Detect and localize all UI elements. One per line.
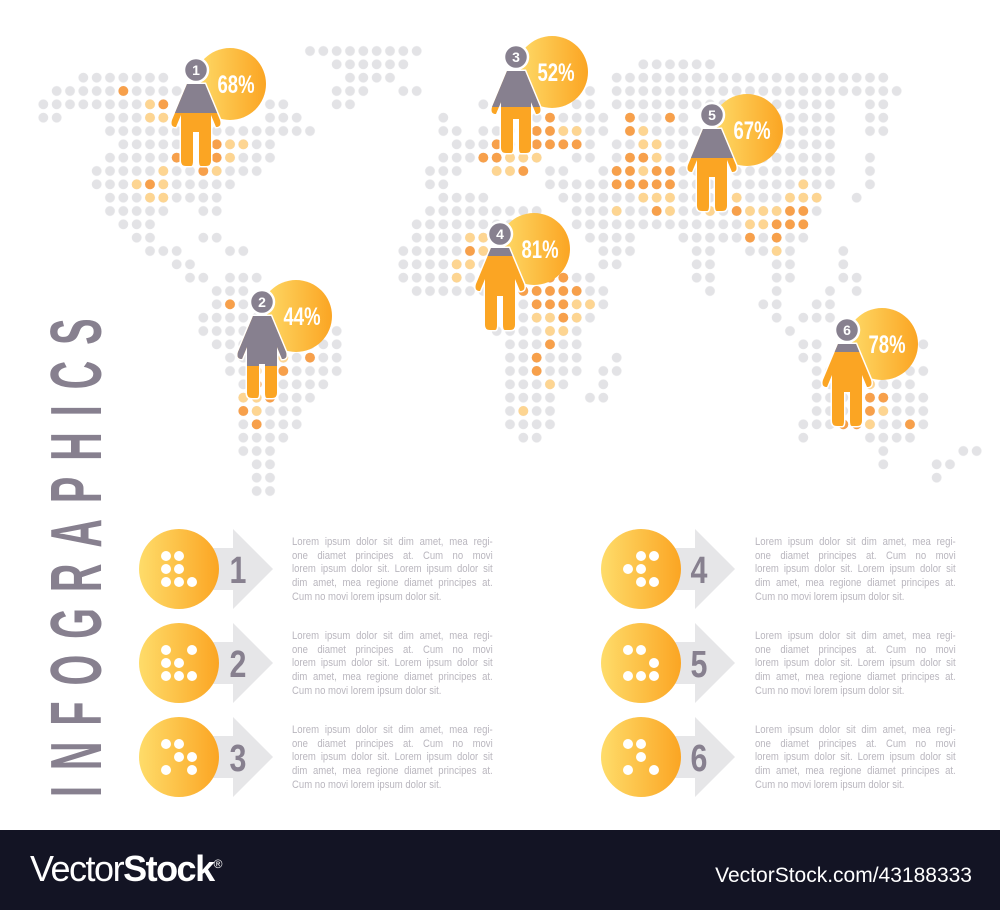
text block 5 xyxy=(755,630,956,697)
figure 5: 67%: 67% xyxy=(733,116,771,145)
text block 2 xyxy=(292,630,493,697)
text block 3: dim amet, mea regione diamet principes at. xyxy=(292,765,493,777)
figure 2: 44%: 44% xyxy=(283,302,321,331)
text block 5: lorem ipsum dolor sit. Lorem ipsum dolor sit xyxy=(755,657,956,669)
figure 3: 52% xyxy=(486,36,588,153)
footer logo: VectorStock® xyxy=(30,848,221,889)
text block 3: lorem ipsum dolor sit. Lorem ipsum dolor sit xyxy=(292,751,493,763)
figure 6: 78%: 78% xyxy=(868,330,906,359)
figure 2: 44% xyxy=(232,280,332,398)
text block 6: Cum no movi lorem ipsum dolor sit. xyxy=(755,779,904,791)
highlighted orange dots xyxy=(118,86,915,429)
text block 3: Lorem ipsum dolor sit dim amet, mea regi- xyxy=(292,724,493,736)
text block 1: dim amet, mea regione diamet principes at. xyxy=(292,577,493,589)
item 5 xyxy=(601,623,735,703)
text block 4 xyxy=(755,536,956,603)
text block 1: lorem ipsum dolor sit. Lorem ipsum dolor sit xyxy=(292,563,493,575)
text block 1 xyxy=(292,536,493,603)
text block 6: one diamet principes at. Cum no movi xyxy=(755,738,956,750)
item 4: 4 xyxy=(691,550,707,592)
figure 5: 67% xyxy=(682,94,783,211)
text block 5: dim amet, mea regione diamet principes at. xyxy=(755,671,956,683)
text block 4: Lorem ipsum dolor sit dim amet, mea regi- xyxy=(755,536,956,548)
text block 4: one diamet principes at. Cum no movi xyxy=(755,550,956,562)
figure 2: 44%: 2 xyxy=(258,294,266,310)
figure 4: 81% xyxy=(470,213,570,330)
figure 1: 68% xyxy=(166,48,266,166)
text block 1: Cum no movi lorem ipsum dolor sit. xyxy=(292,591,441,603)
figure 6: 78% xyxy=(817,308,918,426)
item 2 xyxy=(139,623,273,703)
item 3 xyxy=(139,717,273,797)
text block 6: Lorem ipsum dolor sit dim amet, mea regi- xyxy=(755,724,956,736)
figure 4: 81%: 4 xyxy=(496,226,504,242)
text block 6: dim amet, mea regione diamet principes at. xyxy=(755,765,956,777)
figure 1: 68%: 68% xyxy=(217,70,255,99)
figure 3: 52%: 3 xyxy=(512,49,520,65)
list items with braille icons xyxy=(139,529,735,797)
text block 4: dim amet, mea regione diamet principes at. xyxy=(755,577,956,589)
text block 5: one diamet principes at. Cum no movi xyxy=(755,644,956,656)
text block 6: lorem ipsum dolor sit. Lorem ipsum dolor sit xyxy=(755,751,956,763)
text block 6 xyxy=(755,724,956,791)
item 6 xyxy=(601,717,735,797)
text block 3 xyxy=(292,724,493,791)
figure 3: 52%: 52% xyxy=(537,58,575,87)
text block 2: Cum no movi lorem ipsum dolor sit. xyxy=(292,685,441,697)
text block 3: Cum no movi lorem ipsum dolor sit. xyxy=(292,779,441,791)
item 5: 5 xyxy=(691,644,707,686)
text block 2: lorem ipsum dolor sit. Lorem ipsum dolor sit xyxy=(292,657,493,669)
item 6: 6 xyxy=(691,738,707,780)
item 3: 3 xyxy=(230,738,246,780)
figure 4: 81%: 81% xyxy=(521,235,559,264)
text block 1: one diamet principes at. Cum no movi xyxy=(292,550,493,562)
text block 5: Cum no movi lorem ipsum dolor sit. xyxy=(755,685,904,697)
world map with figures xyxy=(38,36,982,496)
text block 2: dim amet, mea regione diamet principes at. xyxy=(292,671,493,683)
footer bar xyxy=(0,830,1000,910)
item 4 xyxy=(601,529,735,609)
text block 2: Lorem ipsum dolor sit dim amet, mea regi- xyxy=(292,630,493,642)
item 1: 1 xyxy=(230,550,246,592)
text block 1: Lorem ipsum dolor sit dim amet, mea regi- xyxy=(292,536,493,548)
text block 4: Cum no movi lorem ipsum dolor sit. xyxy=(755,591,904,603)
item 1 xyxy=(139,529,273,609)
text block 3: one diamet principes at. Cum no movi xyxy=(292,738,493,750)
figure 1: 68%: 1 xyxy=(192,62,200,78)
footer url: VectorStock.com/43188333 xyxy=(715,864,972,887)
text block 4: lorem ipsum dolor sit. Lorem ipsum dolor sit xyxy=(755,563,956,575)
text block 5: Lorem ipsum dolor sit dim amet, mea regi- xyxy=(755,630,956,642)
figure 6: 78%: 6 xyxy=(843,322,851,338)
text block 2: one diamet principes at. Cum no movi xyxy=(292,644,493,656)
item 2: 2 xyxy=(230,644,246,686)
figure 5: 67%: 5 xyxy=(708,107,716,123)
